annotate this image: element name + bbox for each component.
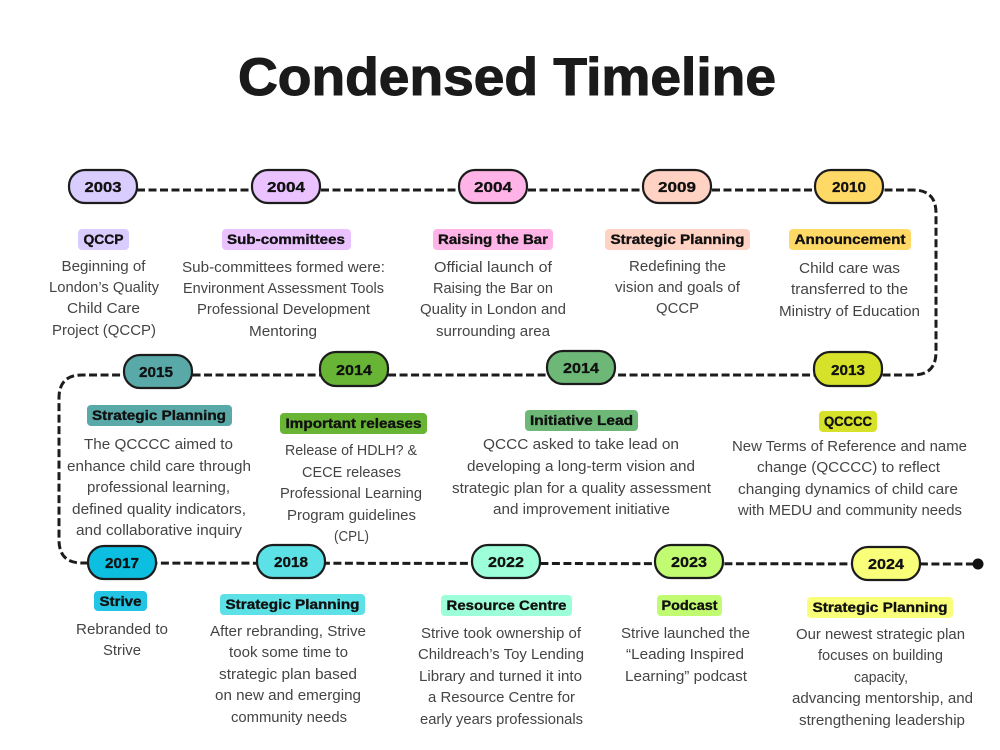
badge QCCCC: [819, 411, 877, 432]
description: Release of HDLH? &: [285, 442, 417, 459]
year pill 2010: [815, 170, 883, 203]
description: After rebranding, Strive: [210, 623, 366, 640]
badge Initiative Lead: Initiative Lead: [530, 412, 633, 428]
description: Professional Development: [197, 301, 371, 318]
description: Rebranded to: [76, 621, 168, 638]
milestone: 2010 Announcement: [779, 170, 920, 320]
description: strengthening leadership: [799, 712, 965, 729]
year pill 2024: 2024: [868, 556, 905, 573]
year pill 2003: [69, 170, 137, 203]
year pill 2024: [852, 547, 920, 580]
badge Sub-committees: Sub-committees: [227, 231, 345, 247]
description: (CPL): [334, 528, 369, 545]
badge Raising the Bar: Raising the Bar: [438, 231, 549, 247]
badge Strategic Planning: Strategic Planning: [812, 599, 948, 615]
description: Environment Assessment Tools: [183, 280, 384, 297]
description: Sub-committees formed were:: [182, 259, 385, 276]
badge QCCP: [78, 229, 129, 250]
description: Quality in London and: [420, 301, 566, 318]
description: [280, 442, 422, 545]
year pill 2014: 2014: [563, 360, 600, 377]
description: [67, 436, 251, 539]
milestone: 2022 Resource Centre: [418, 545, 584, 728]
description: “Leading Inspired: [626, 646, 744, 663]
badge Announcement: [789, 229, 911, 250]
description: Mentoring: [249, 323, 317, 340]
description: The QCCCC aimed to: [84, 436, 233, 453]
badge QCCP: QCCP: [84, 231, 124, 247]
badge Strategic Planning: Strategic Planning: [92, 407, 226, 423]
description: enhance child care through: [67, 458, 251, 475]
description: Library and turned it into: [419, 668, 582, 685]
year pill 2017: 2017: [105, 555, 139, 572]
description: focuses on building: [818, 647, 943, 664]
year pill 2015: 2015: [139, 364, 173, 381]
year pill 2014: [320, 352, 388, 386]
title: Condensed Timeline: [238, 48, 776, 107]
description: Professional Learning: [280, 485, 422, 502]
badge Strategic Planning: [605, 229, 750, 250]
description: [615, 258, 741, 317]
badge Important releases: Important releases: [286, 415, 422, 431]
badge Announcement: Announcement: [794, 231, 906, 247]
description: Official launch of: [434, 259, 553, 276]
description: Child care was: [799, 260, 900, 277]
year pill 2023: 2023: [671, 554, 707, 571]
badge Strategic Planning: [87, 405, 232, 426]
description: strategic plan for a quality assessment: [452, 480, 712, 497]
badge Strategic Planning: Strategic Planning: [226, 596, 360, 612]
description: QCCP: [656, 300, 699, 317]
year pill 2004: 2004: [267, 179, 306, 196]
description: Strive took ownership of: [421, 625, 582, 642]
description: Redefining the: [629, 258, 726, 275]
description: changing dynamics of child care: [738, 481, 958, 498]
milestone: 2024 Strategic Planning: [792, 547, 973, 729]
description: community needs: [231, 709, 347, 726]
description: [210, 623, 366, 726]
year pill 2010: 2010: [832, 179, 866, 196]
description: Child Care: [67, 300, 140, 317]
badge Raising the Bar: [433, 229, 553, 250]
description: [76, 621, 168, 659]
description: [621, 625, 750, 685]
year pill 2015: [124, 355, 192, 388]
description: [792, 626, 973, 729]
description: [732, 438, 967, 519]
description: capacity,: [854, 669, 908, 686]
year pill 2003: 2003: [84, 179, 122, 196]
description: a Resource Centre for: [428, 689, 575, 706]
badge Important releases: [280, 413, 427, 434]
milestone: 2014 Initiative Lead: [452, 351, 712, 518]
description: professional learning,: [87, 479, 230, 496]
year pill 2013: 2013: [831, 362, 865, 379]
year pill 2004: [459, 170, 527, 203]
milestone: 2015 Strategic Planning: [67, 355, 251, 539]
year pill 2009: 2009: [658, 179, 696, 196]
description: New Terms of Reference and name: [732, 438, 967, 455]
timeline dashed path: [59, 190, 978, 564]
year pill 2004: 2004: [474, 179, 513, 196]
milestone: 2013 QCCCC: [732, 352, 967, 519]
description: Learning” podcast: [625, 668, 748, 685]
badge Initiative Lead: [525, 410, 638, 431]
year pill 2014: 2014: [336, 362, 373, 379]
description: [779, 260, 920, 320]
badge Resource Centre: Resource Centre: [446, 597, 567, 613]
description: [452, 436, 712, 518]
description: [420, 259, 566, 340]
end dot: [972, 558, 984, 570]
description: CECE releases: [302, 464, 401, 481]
description: Project (QCCP): [52, 322, 156, 339]
milestone: 2004 Sub-committees: [182, 170, 385, 340]
year pill 2018: 2018: [274, 554, 308, 571]
year pill 2004: [252, 170, 320, 203]
year pill 2022: 2022: [488, 554, 524, 571]
milestone: 2003 QCCP: [49, 170, 159, 339]
description: on new and emerging: [215, 687, 361, 704]
badge Podcast: Podcast: [662, 597, 718, 613]
description: with MEDU and community needs: [737, 502, 962, 519]
year pill 2018: [257, 545, 325, 578]
badge QCCCC: QCCCC: [824, 413, 872, 429]
description: Strive launched the: [621, 625, 750, 642]
description: Beginning of: [62, 258, 146, 275]
description: defined quality indicators,: [72, 501, 246, 518]
description: London’s Quality: [49, 279, 159, 296]
description: Raising the Bar on: [433, 280, 553, 297]
description: surrounding area: [436, 323, 551, 340]
badge Sub-committees: [222, 229, 351, 250]
year pill 2014: [547, 351, 615, 384]
description: [418, 625, 584, 728]
description: [182, 259, 385, 340]
description: advancing mentorship, and: [792, 690, 973, 707]
description: Strive: [103, 642, 141, 659]
description: Childreach’s Toy Lending: [418, 646, 584, 663]
year pill 2022: [472, 545, 540, 578]
description: Our newest strategic plan: [796, 626, 965, 643]
year pill 2009: [643, 170, 711, 203]
description: strategic plan based: [219, 666, 357, 683]
description: developing a long-term vision and: [467, 458, 695, 475]
milestone: 2017 Strive: [76, 546, 168, 659]
badge Strategic Planning: [220, 594, 365, 615]
badge Strategic Planning: [807, 597, 953, 618]
milestone: 2009 Strategic Planning: [605, 170, 750, 317]
description: Program guidelines: [287, 507, 416, 524]
milestone: 2004 Raising the Bar: [420, 170, 566, 340]
description: and improvement initiative: [493, 501, 670, 518]
description: Ministry of Education: [779, 303, 920, 320]
milestone: 2018 Strategic Planning: [210, 545, 366, 726]
badge Strategic Planning: Strategic Planning: [610, 231, 744, 247]
badge Strive: Strive: [100, 593, 142, 609]
milestone: 2014 Important releases: [280, 352, 427, 545]
description: [49, 258, 159, 339]
description: change (QCCCC) to reflect: [757, 459, 941, 476]
description: took some time to: [229, 644, 348, 661]
description: early years professionals: [420, 711, 583, 728]
description: vision and goals of: [615, 279, 741, 296]
badge Resource Centre: [441, 595, 572, 616]
year pill 2013: [814, 352, 882, 386]
description: transferred to the: [791, 281, 908, 298]
description: QCCC asked to take lead on: [483, 436, 679, 453]
milestone: 2023 Podcast: [621, 545, 750, 685]
description: and collaborative inquiry: [76, 522, 243, 539]
